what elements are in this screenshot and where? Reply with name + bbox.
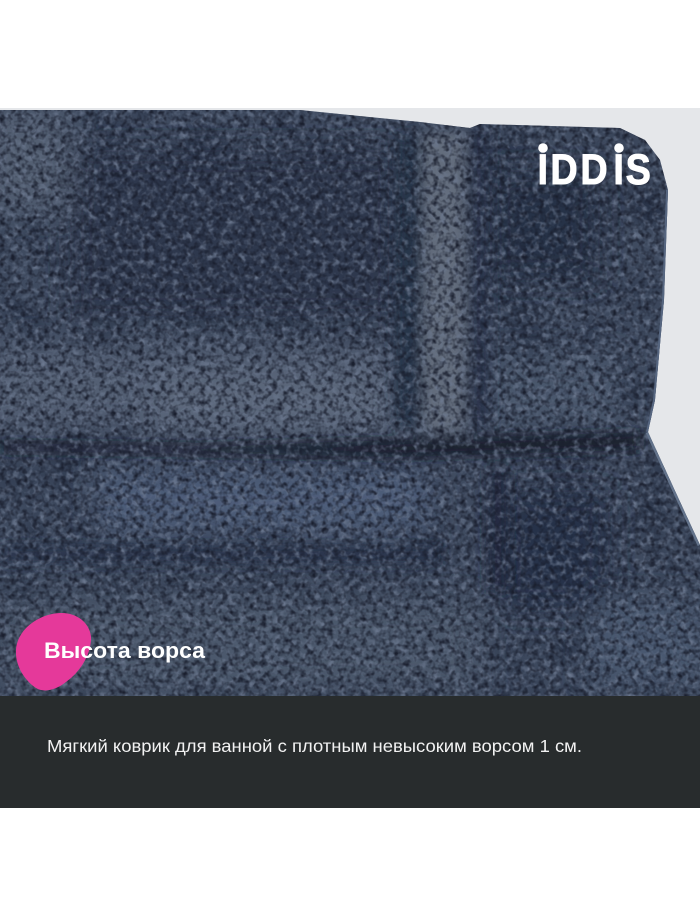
heading badge: Высота ворса — [16, 613, 205, 690]
towel photo — [0, 108, 700, 696]
logo: IDDIS: IDDIS — [538, 145, 651, 194]
photo background — [0, 108, 700, 696]
heading: Высота ворса — [44, 638, 205, 663]
info band — [0, 696, 700, 808]
icon: pink blob — [16, 613, 91, 690]
description text: Мягкий коврик для ванной с плотным невысоким ворсом 1 см. — [47, 736, 582, 756]
